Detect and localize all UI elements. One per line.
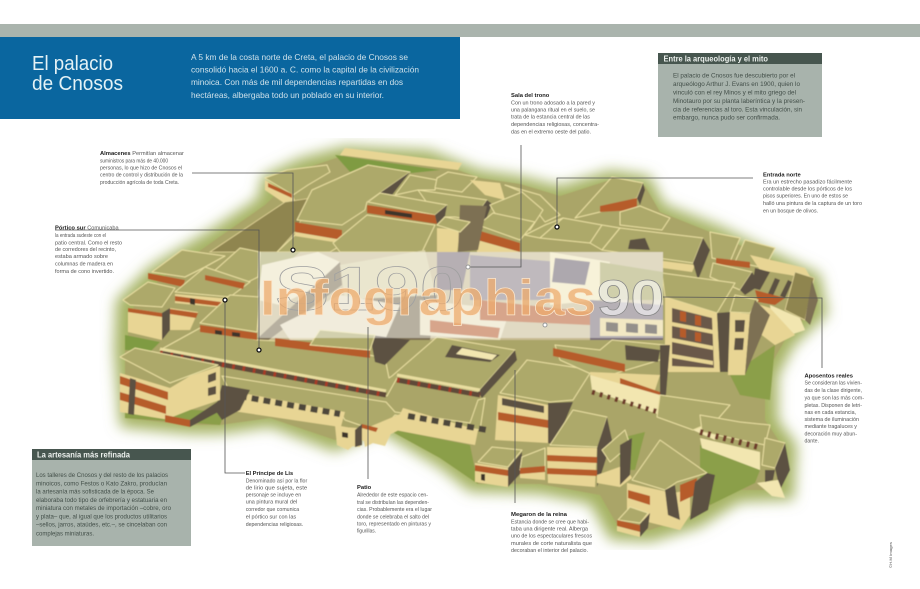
leader: pórtico sur xyxy=(55,230,259,350)
north-east block xyxy=(575,177,643,218)
callout: el príncipe de lis: de lirio que sujeta, este xyxy=(246,486,307,492)
callout: megaron de la reina: decoraban el interior del palacio. xyxy=(511,548,588,554)
callout: aposentos reales: Se consideran las vivien- xyxy=(804,380,862,386)
callout: aposentos reales: dante. xyxy=(804,438,819,444)
callout: megaron de la reina: Estancia donde se cree que habi- xyxy=(511,519,589,525)
callout: sala del trono: dependencias religiosas, concentra- xyxy=(511,122,599,128)
callout: sala del trono: una palangana ritual en el suelo, se xyxy=(511,107,595,113)
leader: sala del trono xyxy=(468,145,521,267)
panel: la artesanía más refinada: la artesanía más sofisticada de la época. Se xyxy=(36,489,154,496)
panel: entre la arqueología y el mito: arqueólogo Arthur J. Evans en 1900, quien lo xyxy=(673,81,800,88)
raised storeroom block xyxy=(333,215,435,252)
callout: patio: Alrededor de este espacio cen- xyxy=(357,493,428,499)
callout: el príncipe de lis: corredor que comunica xyxy=(246,507,300,513)
callout: sala del trono: Con un trono adosado a la pared y xyxy=(511,100,595,106)
south-east lone building xyxy=(632,440,707,490)
title: El palacio xyxy=(32,53,113,75)
panel: la artesanía más refinada: Los talleres de Cnosos y del resto de los palacios xyxy=(36,472,169,479)
callout: el príncipe de lis: El Príncipe de Lis xyxy=(246,471,293,477)
palace illustration xyxy=(114,146,828,542)
panel: entre la arqueología y el mito: vinculó con el rey Minos y el mito griego del xyxy=(673,90,797,96)
callout: pórtico sur: estaba armado sobre xyxy=(55,254,108,260)
callout: patio: tral se distribuían las dependen- xyxy=(357,500,429,506)
callout: aposentos reales: decoración muy abun- xyxy=(804,431,857,437)
panel: la artesanía más refinada: y plata– que, al igual que los productos utilitarios xyxy=(36,513,168,520)
callout: pórtico sur: de corredores del recinto, xyxy=(55,247,116,253)
callout: pórtico sur xyxy=(55,225,122,275)
callout: el príncipe de lis xyxy=(246,471,307,528)
back row terraces xyxy=(340,148,462,170)
callout: el príncipe de lis: el pórtico sur con las xyxy=(246,515,296,521)
panel: entre la arqueología y el mito: Entre la arqueología y el mito xyxy=(664,54,768,64)
callout: megaron de la reina: murales de corte naturalista que xyxy=(511,541,592,547)
callout: patio: donde se celebraba el salto del xyxy=(357,514,429,520)
callout: el príncipe de lis: una pintura mural del xyxy=(246,500,297,506)
panel: la artesanía más refinada: minoicos, como Festos o Kato Zakro, producían xyxy=(36,481,167,488)
callout: entrada norte: pisos superiores. En uno de estos se xyxy=(763,194,848,200)
panel: entre la arqueología y el mito: El palacio de Cnosos fue descubierto por el xyxy=(673,72,796,80)
header panel xyxy=(0,37,460,119)
callout: sala del trono: das en el extremo oeste del patio. xyxy=(511,129,591,135)
translucent watermark veil xyxy=(258,252,663,338)
green ground halo xyxy=(114,146,828,542)
callout: aposentos reales: ya que son las más com- xyxy=(804,395,864,401)
leader: aposentos reales xyxy=(663,297,822,368)
callout: aposentos reales: pletas. Disponen de letri- xyxy=(804,403,862,409)
callout: patio: Patio xyxy=(357,485,372,491)
panel: entre la arqueología y el mito: embargo, nunca pudo ser confirmada. xyxy=(673,114,780,122)
callout: almacenes: personas, lo que hizo de Cnosos el xyxy=(100,166,182,172)
callout: entrada norte: Era un estrecho pasadizo fácilmente xyxy=(763,179,852,185)
south-east stepped buildings xyxy=(500,360,592,402)
leader: megaron de la reina xyxy=(514,370,516,503)
image credit: ©H.M Images xyxy=(888,542,893,568)
big north roof xyxy=(297,165,410,225)
callout: pórtico sur: columnas de madera en xyxy=(55,261,113,267)
callout: sala del trono xyxy=(511,93,599,135)
callout: pórtico sur: patio central. Como el resto xyxy=(55,240,122,246)
leader: entrada norte xyxy=(557,178,753,227)
central court, below the watermark veil xyxy=(258,252,663,340)
callout: pórtico sur: la entrada sudeste con el xyxy=(55,233,106,239)
title: de Cnosos xyxy=(32,73,123,95)
panel: la artesanía más refinada: miniatura con metales de importación –cobre, oro xyxy=(36,505,171,512)
top grey band xyxy=(0,24,920,37)
leader: almacenes xyxy=(192,173,293,250)
watermark text: 90 xyxy=(597,270,664,326)
east residential tower xyxy=(662,273,735,313)
callout: patio: toro, representado en pinturas y xyxy=(357,521,431,527)
watermark text: Infographias xyxy=(260,270,596,326)
grass patches xyxy=(125,345,775,505)
callout: el príncipe de lis: dependencias religiosas. xyxy=(246,522,304,528)
queen's megaron rooms xyxy=(550,410,607,447)
panel: entre la arqueología y el mito: Minotauro por su planta laberíntica y la presen- xyxy=(673,98,805,105)
callout: entrada norte: halló una pintura de la captura de un toro xyxy=(763,201,862,207)
watermark text xyxy=(260,255,664,326)
callout: entrada norte: controlable desde los pórticos de los xyxy=(763,186,852,192)
lower terrace and windowed wall xyxy=(222,376,485,432)
panel: la artesanía más refinada: elaboraba todo tipo de orfebrería y estatuaria en xyxy=(36,497,167,504)
callout: aposentos reales: nas en cada estancia, xyxy=(804,410,856,416)
callout: patio: figurillas. xyxy=(357,529,376,535)
callout: almacenes: suministros para más de 40.000 xyxy=(100,158,168,164)
callout: entrada norte: en un bosque de olivos. xyxy=(763,208,818,214)
callout: sala del trono: Sala del trono xyxy=(511,93,550,99)
panel: la artesanía más refinada: complejas miniaturas. xyxy=(36,530,94,537)
panel: la artesanía más refinada: La artesanía más refinada xyxy=(37,450,131,460)
callout: aposentos reales: Aposentos reales xyxy=(804,374,853,380)
callout: almacenes: centro de control y distribución de la xyxy=(100,172,184,178)
callout: almacenes: producción agrícola de toda Creta. xyxy=(100,180,179,186)
callout: megaron de la reina xyxy=(511,512,592,554)
callout: megaron de la reina: taba una dirigente real. Alberga xyxy=(511,526,589,532)
callout: entrada norte xyxy=(763,173,862,214)
callout: entrada norte: Entrada norte xyxy=(763,173,801,179)
south-west residence xyxy=(120,348,218,383)
panel: la artesanía más refinada xyxy=(32,449,191,546)
watermark text: S190 xyxy=(275,255,465,324)
callout: pórtico sur: Pórtico sur Comunicaba xyxy=(55,225,120,231)
leader: príncipe de lis xyxy=(225,300,245,473)
panel: entre la arqueología y el mito xyxy=(658,53,822,137)
callout: el príncipe de lis: personaje se incluye en xyxy=(246,493,301,499)
callout: pórtico sur: forma de cono invertido. xyxy=(55,269,114,275)
callout: aposentos reales: sistema de iluminación xyxy=(804,417,859,423)
intro text: hectáreas, albergaba todo un poblado en su interior. xyxy=(191,90,384,100)
callout: megaron de la reina: uno de los espectaculares frescos xyxy=(511,534,592,540)
south-west building cluster xyxy=(152,250,225,277)
callout: patio: cias. Probablemente era el lugar xyxy=(357,507,432,513)
callout: sala del trono: trata de la estancia central de las xyxy=(511,115,590,121)
intro text: A 5 km de la costa norte de Creta, el palacio de Cnosos se xyxy=(191,52,408,62)
callout: aposentos reales: mediante tragaluces y xyxy=(804,424,857,430)
leader: patio xyxy=(367,327,369,479)
callout: almacenes: Almacenes Permitían almacenar xyxy=(100,151,184,157)
panel: la artesanía más refinada: –sellos, jarros, ataúdes, etc.–, se cincelaban con xyxy=(36,522,167,529)
long south terrace xyxy=(125,335,160,352)
callout: aposentos reales: das de la clase dirigente, xyxy=(804,388,862,394)
intro text: minoica. Con más de mil dependencias repartidas en dos xyxy=(191,77,403,87)
callout: almacenes xyxy=(100,151,184,186)
marker dots xyxy=(223,225,559,352)
callout: megaron de la reina: Megaron de la reina xyxy=(511,512,568,518)
intro text xyxy=(191,52,419,100)
upper colonnade xyxy=(160,349,386,391)
callout: el príncipe de lis: Denominado así por la flor xyxy=(246,478,307,484)
callout: aposentos reales xyxy=(804,374,864,444)
intro text: consolidó hacia el 1600 a. C. como la capital de la civilización xyxy=(191,64,419,74)
panel: entre la arqueología y el mito: cia de referencias al toro. Esta vinculación, sin xyxy=(673,106,802,114)
callout: patio xyxy=(357,485,432,535)
